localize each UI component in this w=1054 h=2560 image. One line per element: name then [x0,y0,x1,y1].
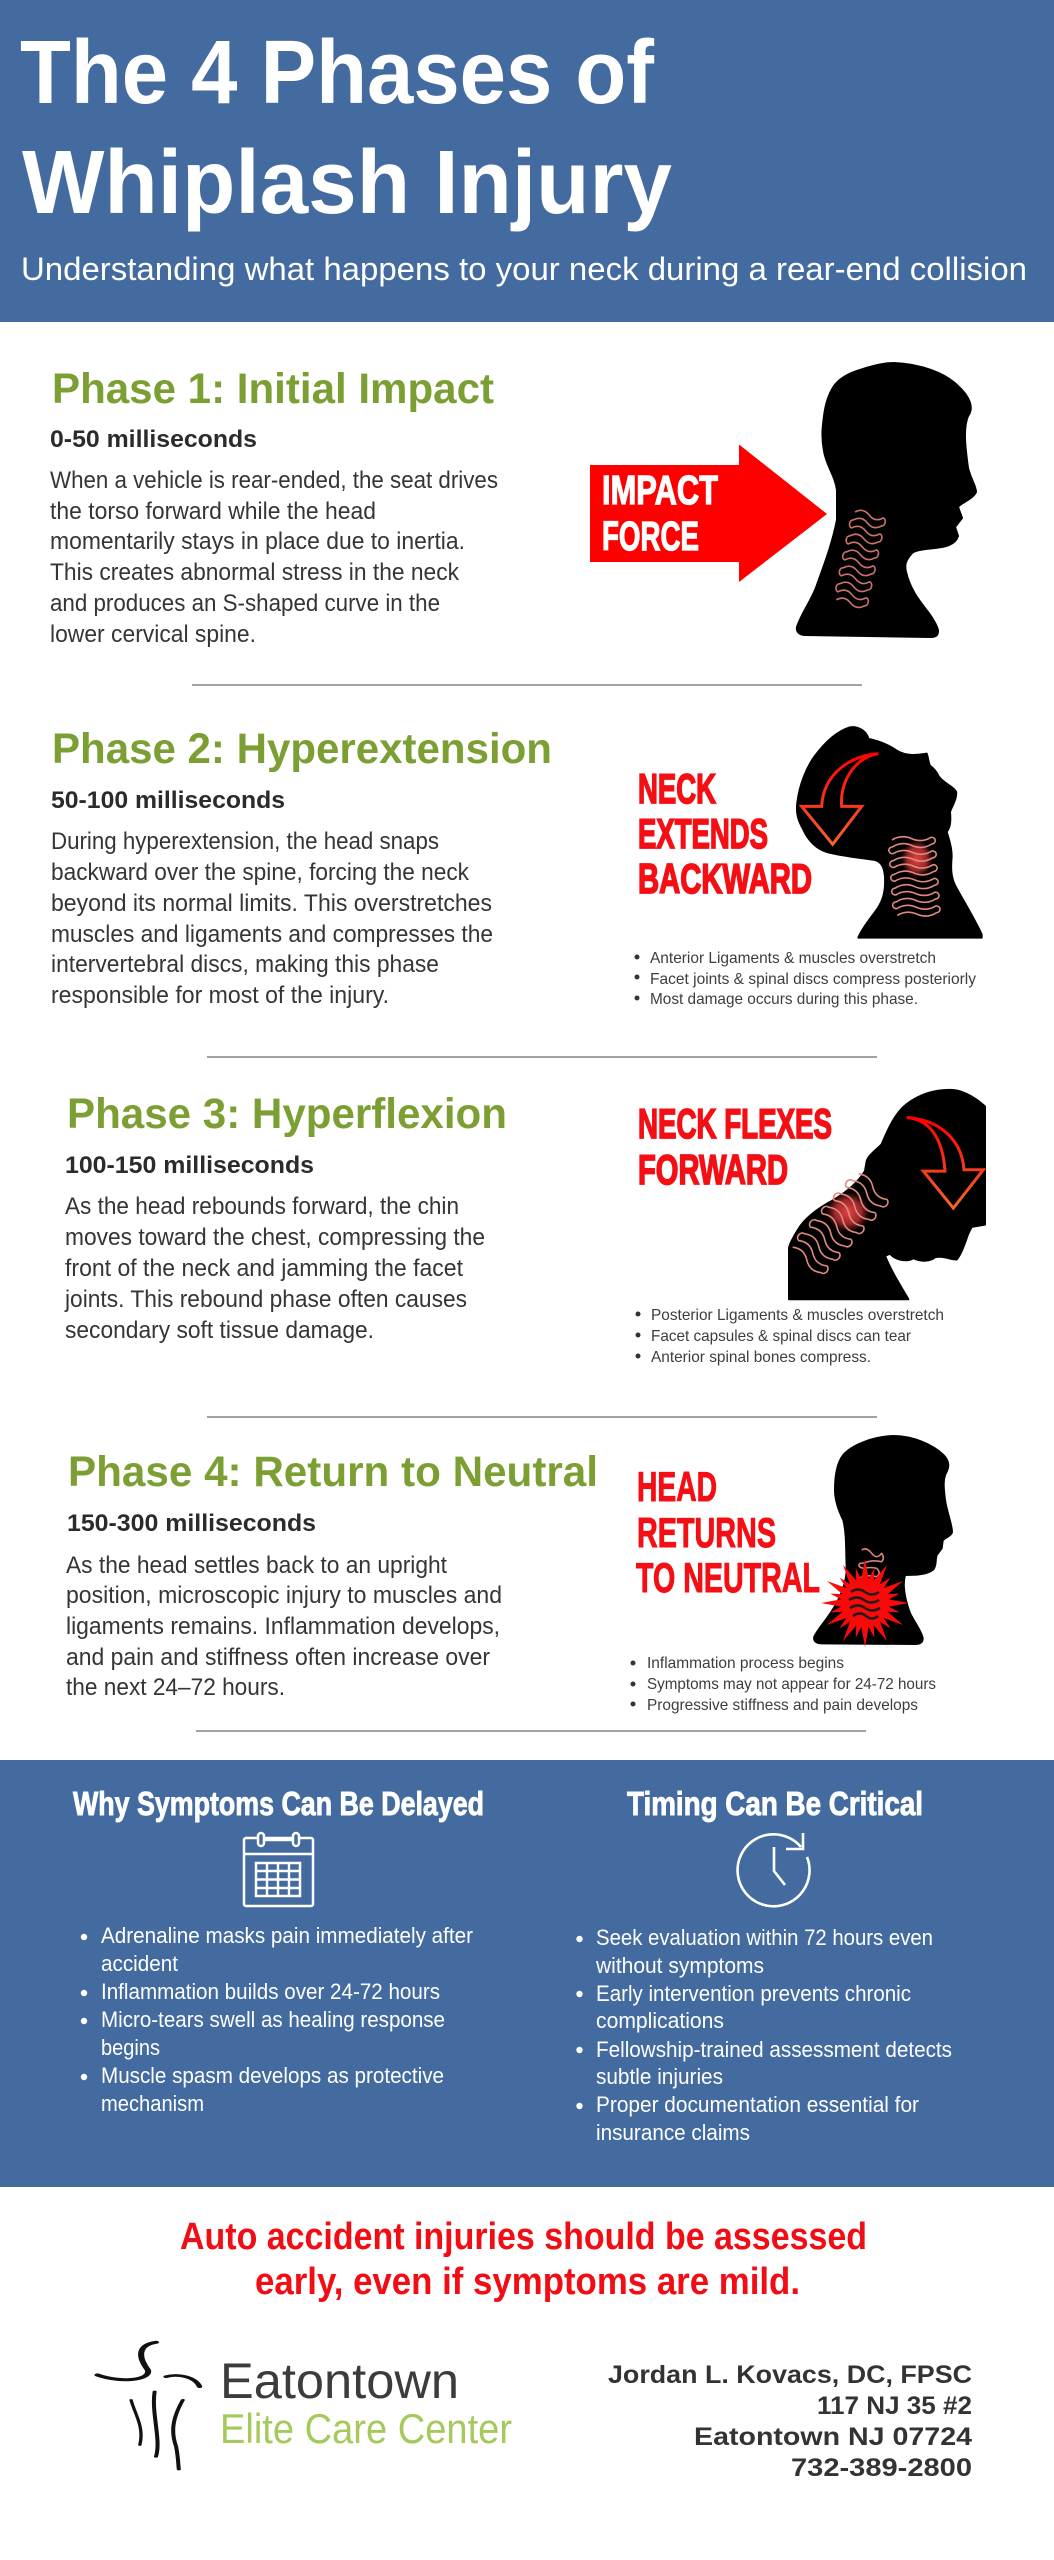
panel: phase 4 text [66,1448,598,1701]
phase 1 heading: Phase 1: Initial Impact [52,365,494,413]
callout: neck extends backward [638,765,812,902]
phase 3 description: front of the neck and jamming the facet [65,1255,463,1282]
header banner [0,0,1054,322]
panel: delay and timing [0,1760,1054,2187]
list: phase 3 effects: Posterior Ligaments & muscles overstretch [651,1307,944,1324]
spine: inside burst [849,1590,880,1618]
arrow: forward motion [907,1118,983,1208]
callout: neck extends backward: EXTENDS [638,810,768,857]
phase 1 description: When a vehicle is rear-ended, the seat drives [50,467,498,494]
arrow: impact force [590,444,827,582]
logo: Eatontown Elite Care Center [97,2342,512,2469]
contact details: 732-389-2800 [791,2454,972,2482]
contact details: Jordan L. Kovacs, DC, FPSC [608,2361,972,2389]
phase 2 description: responsible for most of the injury. [51,982,389,1009]
icon: calendar [244,1833,313,1906]
icon: clock [738,1833,810,1906]
panel: phase 3 text [64,1090,507,1344]
subtitle: Understanding what happens to your neck during a rear-end collision [21,251,1027,287]
callout: assess early: Auto accident injuries should be assessed [180,2216,867,2258]
phase 2 heading: Phase 2: Hyperextension [52,725,552,773]
phase 1 timing: 0-50 milliseconds [50,426,257,453]
contact details: 117 NJ 35 #2 [817,2392,972,2420]
phase 4 description [66,1552,502,1701]
spine: upper [857,1549,883,1578]
callout: assess early [180,2216,867,2303]
arrow: backward motion [802,754,878,844]
spine [833,508,887,609]
phase 2 description: backward over the spine, forcing the neck [51,859,470,886]
list: timing advice [576,1925,952,2145]
phase 3 description: As the head rebounds forward, the chin [65,1193,459,1220]
list: timing advice: insurance claims [596,2120,750,2145]
panel: phase 1 text [50,365,498,648]
phase 3 description: joints. This rebound phase often causes [64,1286,467,1313]
list: phase 4 effects: Inflammation process begins [647,1655,844,1672]
title: Whiplash Injury [22,133,672,233]
list: delayed symptoms: Adrenaline masks pain immediately after [101,1923,473,1948]
phase 4 description: ligaments remains. Inflammation develops, [66,1613,500,1640]
list: delayed symptoms: begins [101,2035,160,2060]
list: delayed symptoms: Muscle spasm develops as protective [101,2063,444,2088]
icon: spine figure [97,2342,200,2469]
list: phase 2 effects: Most damage occurs during this phase. [650,991,918,1008]
phase 4 description: and pain and stiffness often increase over [66,1644,490,1671]
list: phase 3 effects [636,1307,944,1366]
icon: head flexed forward, phase 3 [788,1090,985,1299]
list: phase 2 effects: Facet joints & spinal discs compress posteriorly [650,971,976,988]
phase 2 timing: 50-100 milliseconds [51,787,285,814]
phase 3 heading: Phase 3: Hyperflexion [67,1090,507,1138]
phase 2 description: muscles and ligaments and compresses the [51,921,493,948]
list: delayed symptoms: Micro-tears swell as healing response [101,2007,445,2032]
title [20,23,672,233]
list: delayed symptoms: accident [101,1951,178,1976]
callout: head returns to neutral [636,1463,820,1601]
title: The 4 Phases of [20,23,655,123]
phase 4 heading: Phase 4: Return to Neutral [68,1448,598,1496]
callout: head returns to neutral: TO NEUTRAL [636,1554,820,1601]
phase 1 description: the torso forward while the head [50,498,376,525]
list: delayed symptoms: Inflammation builds over 24-72 hours [101,1979,440,2004]
phase 1 description: and produces an S-shaped curve in the [50,590,440,617]
list: delayed symptoms: mechanism [101,2091,204,2116]
list: timing advice: Seek evaluation within 72 hours even [596,1925,933,1950]
phase 3 description: secondary soft tissue damage. [65,1317,374,1344]
contact details [608,2361,972,2482]
phase 2 description: During hyperextension, the head snaps [51,828,439,855]
phase 3 timing: 100-150 milliseconds [65,1152,314,1179]
list: timing advice: Early intervention prevents chronic [596,1981,911,2006]
icon: head silhouette, phase 1 [797,363,976,637]
list: timing advice: subtle injuries [596,2064,723,2089]
list: phase 4 effects: Progressive stiffness and pain develops [647,1697,918,1714]
spine [888,834,940,918]
phase 3 description: moves toward the chest, compressing the [65,1224,485,1251]
wordmark: Eatontown [220,2353,459,2409]
list: phase 3 effects: Anterior spinal bones compress. [651,1349,871,1366]
list: timing advice: complications [596,2008,724,2033]
phase 1 description: momentarily stays in place due to inertia. [50,528,465,555]
glow: injury site [901,840,933,878]
callout: neck flexes forward: NECK FLEXES [638,1100,832,1147]
callout: assess early: early, even if symptoms are mild. [255,2261,800,2303]
list: phase 2 effects: Anterior Ligaments & muscles overstretch [650,950,936,967]
callout: neck flexes forward: FORWARD [638,1146,788,1193]
phase 1 description: lower cervical spine. [50,621,256,648]
phase 1 description: This creates abnormal stress in the neck [50,559,460,586]
list: phase 4 effects [630,1655,936,1714]
phase 2 description [51,828,493,1009]
phase 1 description [50,467,498,648]
callout: neck flexes forward [638,1100,832,1193]
heading: why symptoms can be delayed: Why Symptoms Can Be Delayed [73,1785,484,1822]
list: timing advice: Fellowship-trained assessment detects [596,2037,952,2062]
arrow: impact force: FORCE [602,513,699,559]
spine [788,1169,892,1278]
list: phase 2 effects [634,950,976,1008]
list: delayed symptoms [81,1923,473,2116]
phase 4 description: As the head settles back to an upright [66,1552,447,1579]
callout: head returns to neutral: RETURNS [637,1509,776,1556]
list: timing advice: without symptoms [595,1953,764,1978]
glow: injury site [826,1192,870,1232]
list: phase 4 effects: Symptoms may not appear for 24-72 hours [647,1676,936,1693]
callout: neck extends backward: BACKWARD [638,855,812,902]
phase 3 description [64,1193,485,1344]
list: timing advice: Proper documentation essential for [596,2092,919,2117]
callout: head returns to neutral: HEAD [637,1463,717,1510]
contact details: Eatontown NJ 07724 [694,2423,972,2451]
arrow: impact force: IMPACT [602,467,718,513]
logo: Eatontown Elite Care Center: Elite Care Center [220,2405,512,2452]
icon: head tilted back, phase 2 [797,727,982,938]
phase 4 timing: 150-300 milliseconds [67,1510,316,1537]
list: phase 3 effects: Facet capsules & spinal discs can tear [651,1328,912,1345]
phase 2 description: beyond its normal limits. This overstretches [51,890,492,917]
phase 4 description: the next 24–72 hours. [66,1674,285,1701]
burst: inflammation [821,1559,909,1647]
panel: phase 2 text [51,725,552,1009]
heading: timing can be critical: Timing Can Be Critical [627,1785,923,1822]
icon: head silhouette with inflammation burst, phase 4 [814,1436,952,1647]
callout: neck extends backward: NECK [638,765,716,812]
phase 4 description: position, microscopic injury to muscles and [66,1582,502,1609]
phase 2 description: intervertebral discs, making this phase [51,951,439,978]
